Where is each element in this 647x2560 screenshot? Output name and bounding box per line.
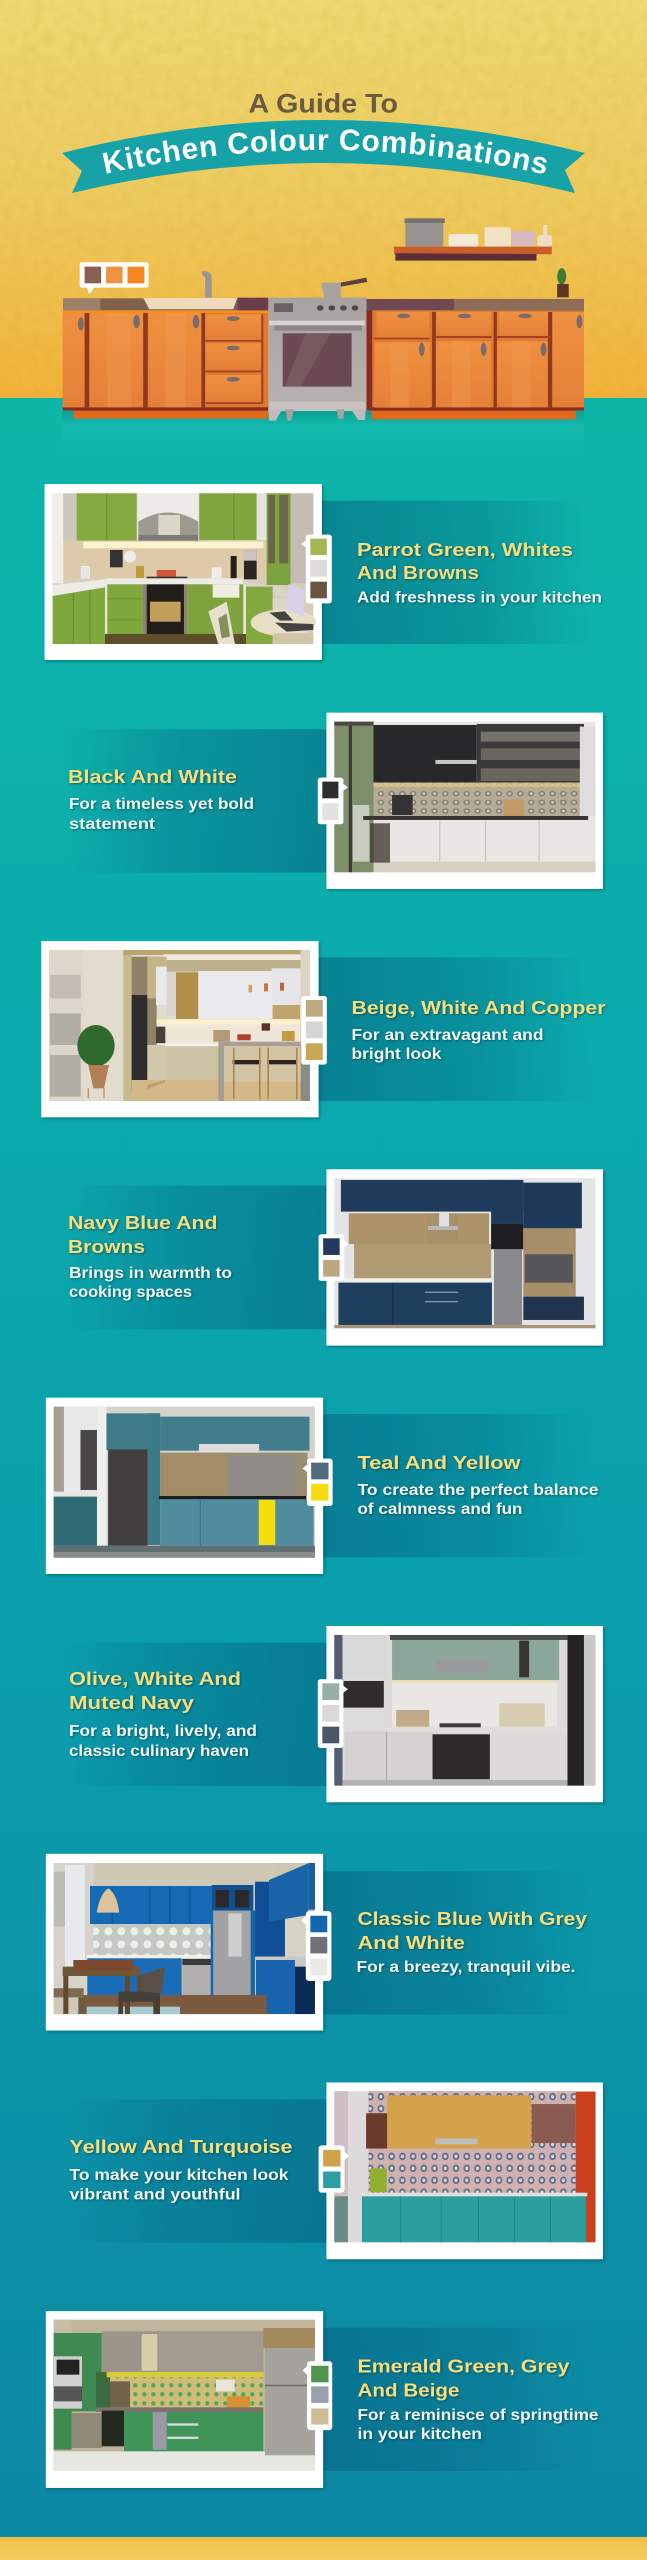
text block: Yellow And Turquoise [70,2136,292,2157]
left cabinets [63,310,268,419]
text block: Olive, White And [69,1668,241,1689]
text block [69,1668,257,1760]
colour palette [319,1234,349,1281]
text block [68,1212,232,1301]
title: A Guide To: A Guide To [248,88,398,118]
text block [70,2136,292,2204]
illustration: kitchen counter [62,218,584,460]
photo: green kitchen [53,493,316,644]
text block: vibrant and youthful [70,2186,240,2204]
text block: Muted Navy [69,1692,195,1713]
floor reflection [62,412,584,460]
photo card with colour band [45,484,590,662]
text block: Brings in warmth to [69,1265,232,1282]
text block: in your kitchen [358,2426,482,2443]
stove and oven [268,298,366,421]
photo card with colour band [41,941,590,1119]
photo: black and white kitchen [334,722,596,872]
colour palette [301,996,327,1065]
panel: Beige, White And Copper [41,941,605,1119]
text block: Teal And Yellow [358,1452,521,1473]
photo card with colour band [66,1169,605,1347]
colour palette [318,1679,348,1748]
photo card with colour band [46,1398,591,1576]
text block: Beige, White And Copper [352,997,606,1018]
ribbon banner with title [62,120,585,193]
text block: And Beige [358,2380,460,2400]
panel: Black And White [66,713,605,891]
colour palette [318,778,348,824]
text block: bright look [352,1046,442,1063]
yellow wall background [0,0,647,398]
text block: For a breezy, tranquil vibe. [356,1959,576,1976]
panel: Olive, White And Muted Navy [66,1626,605,1804]
colour palette [319,2145,350,2193]
text block: For a timeless yet bold [69,796,254,813]
text block [358,2356,599,2443]
text block: To create the perfect balance [358,1482,599,1499]
panel: Teal And Yellow [46,1398,599,1576]
faucet [202,274,208,298]
text block: For an extravagant and [352,1027,544,1044]
bottom yellow bar [0,2537,647,2560]
panel: Emerald Green, Grey And Beige [46,2311,599,2490]
text block [356,1908,588,1976]
photo: yellow and turquoise kitchen [334,2091,596,2242]
colour palette bubble [80,262,149,294]
text block: Black And White [68,766,237,787]
left countertop with sink [63,298,268,310]
text block: Emerald Green, Grey [358,2356,570,2376]
floating shelf with crockery [394,218,552,261]
photo: beige kitchen [49,950,310,1101]
text block: Add freshness in your kitchen [357,590,602,606]
text block: Parrot Green, Whites [357,539,573,560]
photo: emerald kitchen [54,2320,315,2470]
right cabinets [366,310,584,419]
text block: Browns [68,1236,145,1257]
panel: Parrot Green, Whites And Browns [45,484,602,662]
photo card with colour band [66,1626,605,1804]
colour palette [301,1911,331,1981]
photo: navy kitchen [334,1178,596,1328]
photo card with colour band [66,713,605,891]
text block: To make your kitchen look [70,2167,289,2184]
text block: Navy Blue And [68,1212,218,1233]
colour palette [303,2361,332,2430]
panel: Navy Blue And Browns [66,1169,605,1347]
ribbon banner with title: Kitchen Colour Combinations [102,129,547,174]
panel: Yellow And Turquoise [66,2082,605,2261]
text block: statement [69,816,155,833]
text block [358,1452,599,1518]
text block: And Browns [357,562,479,583]
text block [68,766,254,833]
text block: For a bright, lively, and [69,1723,257,1740]
photo: teal kitchen [54,1407,315,1558]
text block [352,997,606,1063]
text block: of calmness and fun [358,1501,522,1518]
photo: classic blue kitchen [54,1863,315,2014]
colour palette [303,1459,333,1506]
photo: olive and white kitchen [334,1635,596,1786]
text block: And White [358,1932,465,1953]
text block [357,539,602,606]
panel: Classic Blue With Grey And White [46,1854,591,2032]
text block: cooking spaces [69,1284,192,1301]
text block: classic culinary haven [69,1743,249,1760]
potted plant [557,268,569,297]
photo card with colour band [46,2311,591,2490]
pot on stove [321,278,367,298]
colour palette [301,535,332,603]
photo card with colour band [46,1854,591,2032]
photo card with colour band [66,2082,605,2261]
paper texture [0,0,647,398]
text block: Classic Blue With Grey [358,1908,588,1929]
text block: For a reminisce of springtime [358,2407,599,2424]
right countertop [366,299,584,310]
